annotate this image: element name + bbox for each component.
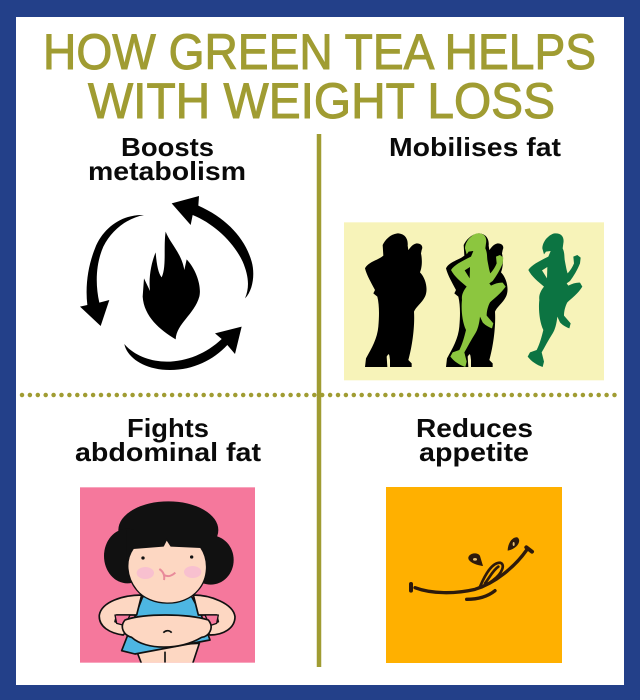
heading: fights abdominal fat: Fights bbox=[127, 413, 209, 443]
panel: fights abdominal fat bbox=[75, 413, 261, 667]
heading: boosts metabolism: metabolism bbox=[88, 156, 246, 186]
illustration: three runner silhouettes bbox=[344, 222, 604, 380]
title bbox=[43, 24, 596, 129]
panel: mobilises fat bbox=[344, 132, 604, 380]
title: WITH WEIGHT LOSS bbox=[88, 73, 555, 129]
panel: boosts metabolism bbox=[80, 132, 253, 370]
heading: boosts metabolism bbox=[88, 132, 246, 186]
heading: reduces appetite bbox=[416, 413, 533, 467]
panel: reduces appetite bbox=[386, 413, 562, 663]
heading: reduces appetite: appetite bbox=[419, 437, 529, 467]
heading: boosts metabolism: Boosts bbox=[121, 132, 214, 162]
icon: flame with circular arrows bbox=[80, 196, 253, 370]
heading: fights abdominal fat: abdominal fat bbox=[75, 437, 261, 467]
title: HOW GREEN TEA HELPS bbox=[43, 24, 596, 80]
icon: smiling mouth with tongue bbox=[411, 537, 532, 599]
heading: reduces appetite: Reduces bbox=[416, 413, 533, 443]
illustration: girl holding belly bbox=[80, 487, 255, 667]
heading: fights abdominal fat bbox=[75, 413, 261, 467]
illustration: licking lips on orange bbox=[386, 487, 562, 663]
heading: mobilises fat: Mobilises fat bbox=[389, 132, 561, 162]
